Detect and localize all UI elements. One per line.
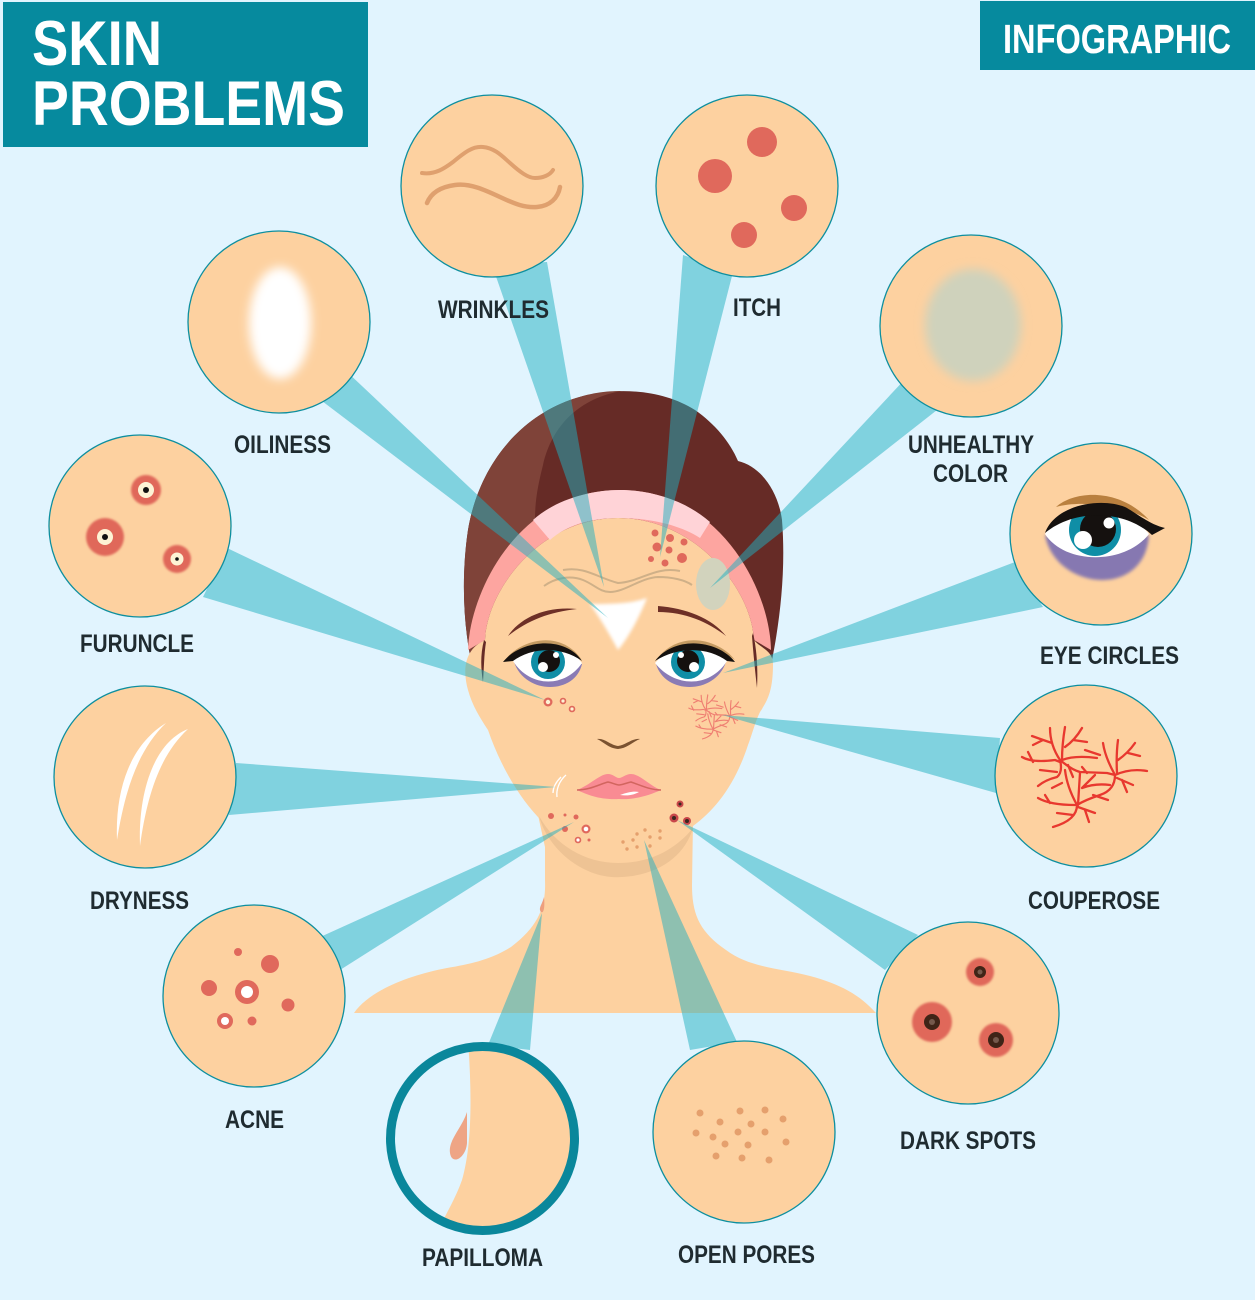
circle: eye circles: [1010, 443, 1192, 625]
label: dark spots: DARK SPOTS: [900, 1127, 1036, 1155]
lips: [577, 774, 661, 799]
title banner: [3, 2, 368, 147]
left eye: [503, 640, 582, 687]
circle: unhealthy color: [880, 235, 1062, 417]
circle: itch: [656, 95, 838, 277]
infographic tag: [980, 1, 1255, 70]
circle: furuncle: [49, 435, 231, 617]
hair strands: [481, 633, 757, 688]
title banner: SKIN: [32, 9, 162, 79]
label: acne: ACNE: [225, 1106, 284, 1134]
cheek couperose: [689, 695, 744, 739]
t-zone oily patch: [590, 598, 647, 650]
circle: oiliness: [188, 231, 370, 413]
label: couperose: COUPEROSE: [1028, 887, 1160, 915]
chin dark spots: [670, 800, 691, 825]
label: open pores: OPEN PORES: [678, 1241, 815, 1269]
dry skin marks: [553, 775, 566, 797]
label: dryness: DRYNESS: [90, 887, 189, 915]
nose: [597, 739, 640, 749]
label: papilloma: PAPILLOMA: [422, 1244, 543, 1272]
eyebrows: [508, 606, 726, 636]
chin shadow: [539, 816, 693, 877]
face: [465, 518, 773, 868]
neck papilloma: [540, 897, 544, 912]
circle: wrinkles: [401, 95, 583, 277]
neck and shoulders: [354, 815, 876, 1013]
headband highlight: [533, 490, 710, 540]
cheek furuncles: [544, 698, 575, 712]
hair: [464, 391, 783, 665]
right eye: [655, 640, 735, 687]
circle: acne: [163, 905, 345, 1087]
label: oiliness: OILINESS: [234, 431, 331, 459]
label: eye circles: EYE CIRCLES: [1040, 642, 1179, 670]
forehead itch spots: [648, 530, 688, 566]
circle: dryness: [54, 686, 236, 868]
chin acne: [548, 813, 590, 843]
label: unhealthy color: COLOR: [933, 460, 1008, 488]
circle: papilloma: [390, 1040, 590, 1240]
forehead grey patch: [696, 558, 730, 610]
headband: [468, 490, 771, 650]
woman portrait: [354, 391, 876, 1013]
forehead wrinkles: [544, 569, 692, 592]
pointer rays: [203, 255, 1043, 1050]
title banner: PROBLEMS: [32, 69, 345, 139]
label: wrinkles: WRINKLES: [438, 296, 549, 324]
chin open pores: [621, 828, 662, 851]
label: unhealthy color: [908, 431, 1034, 488]
circle: dark spots: [877, 922, 1059, 1104]
circle: open pores: [653, 1041, 835, 1223]
label: furuncle: FURUNCLE: [80, 630, 194, 658]
label: itch: ITCH: [733, 294, 781, 322]
label: unhealthy color: UNHEALTHY: [908, 431, 1034, 459]
circle: couperose: [995, 685, 1177, 867]
